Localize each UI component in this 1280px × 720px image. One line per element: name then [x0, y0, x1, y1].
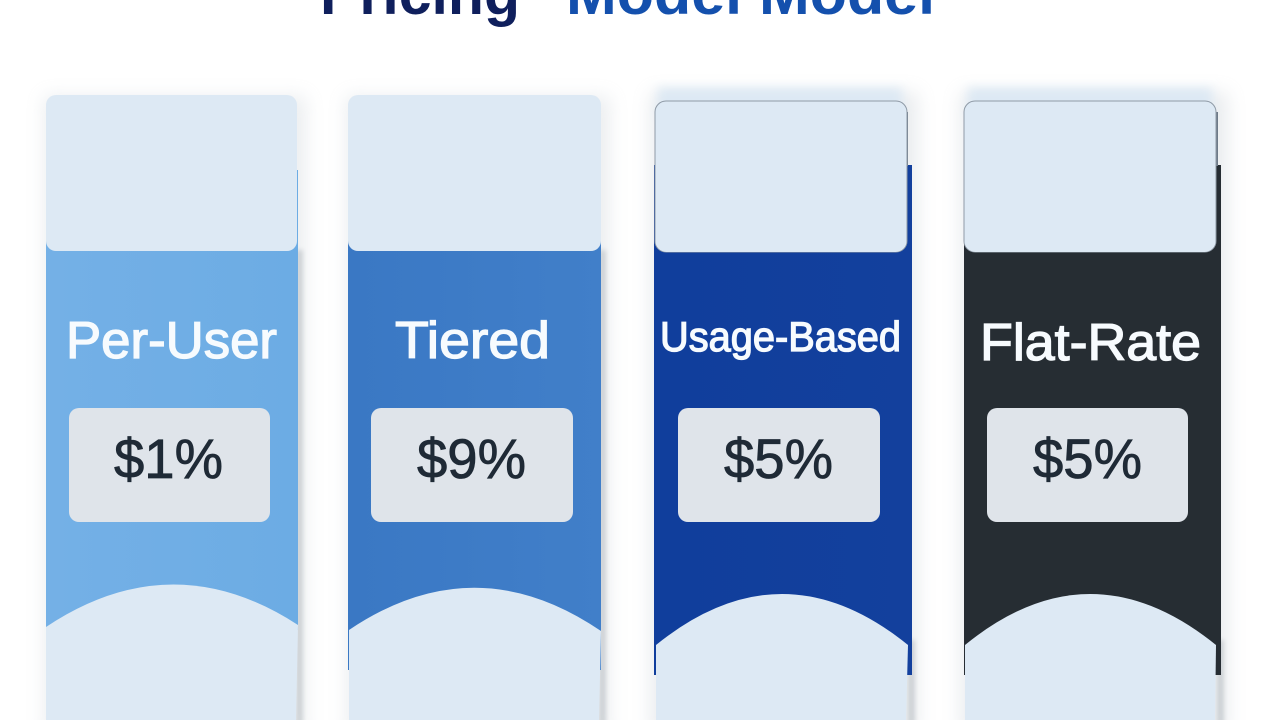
value: Usage-Based price: $5%: [724, 427, 833, 490]
footer: Per-User arc: [46, 584, 298, 720]
value: Tiered price: [371, 408, 573, 522]
title: [320, 0, 935, 27]
panel: Tiered: [346, 95, 610, 720]
value: Flat-Rate price: $5%: [1033, 427, 1142, 490]
icon area: Tiered header: [348, 95, 601, 251]
icon area: Per-User header: [46, 95, 297, 251]
label: Per-User: Per-User: [66, 312, 277, 370]
panel: Usage-Based: [650, 88, 918, 720]
icon area: Usage-Based header: [655, 101, 907, 252]
icon area: Flat-Rate header: [964, 101, 1216, 252]
label: Tiered: Tiered: [395, 312, 550, 370]
panel: Flat-Rate: [960, 88, 1228, 720]
value: Per-User price: [69, 408, 270, 522]
value: Per-User price: $1%: [114, 427, 223, 490]
label: Usage-Based: Usage-Based: [660, 313, 901, 360]
label: Flat-Rate: Flat-Rate: [980, 314, 1201, 372]
footer: Flat-Rate arc: [965, 594, 1216, 720]
footer: Tiered arc: [349, 588, 601, 720]
value: Flat-Rate price: [987, 408, 1188, 522]
value: Tiered price: $9%: [417, 427, 526, 490]
panel: Per-User: [44, 95, 306, 720]
value: Usage-Based price: [678, 408, 880, 522]
footer: Usage-Based arc: [656, 594, 908, 720]
